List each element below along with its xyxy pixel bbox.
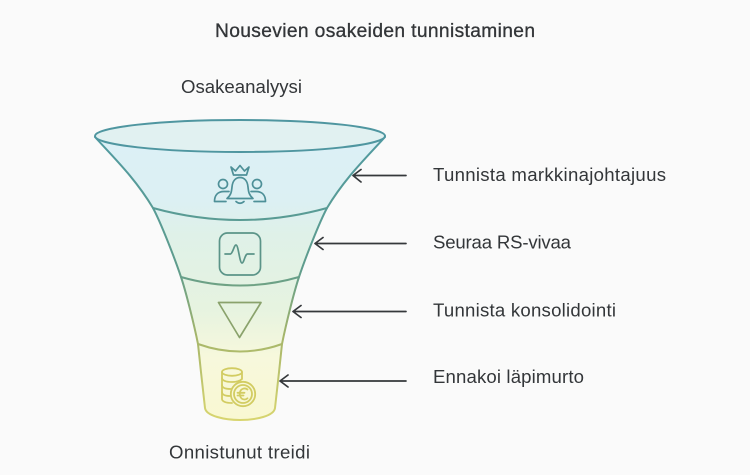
funnel rim (95, 120, 385, 152)
bottom label: Onnistunut treidi (169, 442, 310, 462)
icon: crowned bell and people (214, 166, 266, 203)
label: breakout: Ennakoi läpimurto (433, 366, 584, 387)
icon: coins and euro (222, 368, 255, 406)
icon: downward triangle (218, 302, 261, 338)
funnel body (95, 137, 385, 420)
title: Nousevien osakeiden tunnistaminen (215, 21, 535, 42)
arrow: RS line (315, 238, 406, 250)
funnel outline (95, 137, 385, 420)
label: RS line: Seuraa RS-vivaa (433, 232, 572, 252)
arrow: breakout (280, 375, 406, 387)
label: market leadership: Tunnista markkinajohtajuus (433, 164, 666, 185)
arrow: market leadership (353, 170, 406, 182)
icon: pulse card (220, 233, 260, 275)
arrow: consolidation (293, 306, 406, 318)
funnel (95, 120, 385, 420)
top label: Osakeanalyysi (181, 76, 302, 97)
label: consolidation: Tunnista konsolidointi (433, 300, 616, 320)
